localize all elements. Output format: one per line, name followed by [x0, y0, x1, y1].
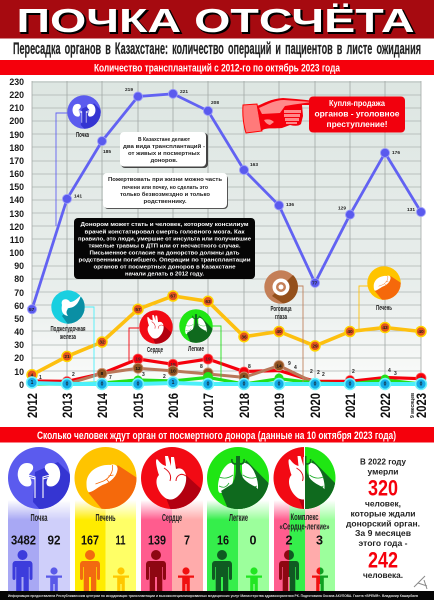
- x axis years: 2016: [165, 393, 181, 418]
- small value labels: 3: [142, 372, 145, 378]
- info box: posthumous donors: Донором может стать и человек, которому консилиум: [80, 222, 248, 228]
- series: pancreas: [27, 377, 426, 389]
- info box: two types of transplant: В Казахстане делают: [138, 137, 190, 143]
- series: liver: 40: [418, 329, 424, 335]
- series: kidney: 219: [125, 87, 133, 93]
- series: kidney: 185: [103, 149, 111, 155]
- panel: lungs waiting: 0: [250, 532, 256, 548]
- info box: living donation: [103, 173, 228, 209]
- y axis labels: 40: [14, 327, 24, 337]
- panel: heart-lung waiting: «Сердце-легкие»: [280, 522, 330, 532]
- x axis years: 2021: [342, 393, 358, 418]
- info box: two types of transplant: доноров.: [150, 158, 178, 164]
- connector lines: [56, 113, 368, 384]
- info box: living donation: Пожертвовать при жизни можно часть: [108, 177, 223, 183]
- series: liver: 36: [241, 334, 247, 340]
- text block: deaths on waiting list: В 2022 году: [360, 458, 407, 466]
- panel: liver waiting: [74, 447, 156, 591]
- series: kidney: 221: [180, 89, 188, 95]
- y axis labels: 180: [9, 143, 24, 153]
- series: pancreas: 0: [66, 382, 69, 388]
- x axis years: 2020: [307, 393, 323, 418]
- panel: liver waiting: Печень: [96, 513, 116, 524]
- text block: deaths on waiting list: донорский орган.: [346, 520, 420, 528]
- info box: posthumous donors: начали делать в 2012 году.: [125, 272, 204, 278]
- info box: living donation: печени или почку, но сделать это: [122, 185, 209, 191]
- y axis labels: 230: [9, 77, 24, 87]
- x axis years: 2015: [130, 393, 146, 418]
- callout: illegal organ trade: [309, 96, 405, 132]
- panel: heart-lung waiting: [274, 447, 336, 591]
- info box: posthumous donors: врачей констатировал смерть головного мозга. Как: [84, 228, 245, 236]
- icon: cornea: Роговица: [270, 306, 292, 313]
- series: cornea: 5: [243, 375, 246, 381]
- small value labels: 4: [388, 368, 391, 374]
- line chart: transplants by organ: [9, 77, 429, 418]
- icon: cornea: глаза: [275, 314, 287, 321]
- series: liver: 43: [382, 325, 388, 331]
- series: liver: 40: [276, 329, 282, 335]
- y axis labels: 210: [9, 103, 24, 113]
- series: liver: 29: [312, 344, 318, 350]
- y axis labels: 160: [9, 169, 24, 179]
- info box: posthumous donors: родственники погибшего. Операции по трансплантации: [78, 256, 251, 264]
- series: heart: 4: [420, 376, 423, 382]
- icon: liver: Печень: [376, 305, 392, 312]
- series: pancreas: 0: [101, 382, 104, 388]
- small value labels: 2: [317, 370, 320, 376]
- y axis labels: 70: [14, 288, 24, 298]
- y axis labels: 140: [9, 195, 24, 205]
- small value labels: 2: [163, 374, 166, 380]
- y axis labels: 20: [14, 353, 24, 363]
- series: heart: 19: [135, 357, 141, 363]
- series: liver: 32: [99, 340, 105, 346]
- small value labels: 2: [72, 372, 75, 378]
- panel: lungs waiting: 16: [217, 532, 229, 548]
- series: cornea: 12: [135, 366, 141, 372]
- callout: illegal organ trade: органов - уголовное: [314, 110, 400, 118]
- y axis labels: 220: [9, 90, 24, 100]
- small value labels: 8: [200, 364, 203, 370]
- text block: deaths on waiting list: 320: [368, 476, 398, 500]
- icon: kidney: Почка: [76, 132, 89, 139]
- callout: illegal organ trade: Купля-продажа: [329, 99, 386, 108]
- panel: heart waiting: 7: [184, 532, 190, 548]
- series: pancreas: 1: [172, 380, 175, 386]
- info box: two types of transplant: [120, 132, 208, 168]
- series: kidney: 176: [392, 150, 400, 156]
- info box: posthumous donors: тяжелые травмы в ДТП или от несчастного случая.: [88, 244, 241, 250]
- y axis labels: 60: [14, 301, 24, 311]
- small value labels: 3: [394, 371, 397, 377]
- icon: heart: Сердце: [147, 347, 163, 354]
- panel: lungs waiting: [207, 447, 288, 591]
- series: kidney: 136: [286, 202, 294, 208]
- y axis labels: 200: [9, 116, 24, 126]
- signature mark: [414, 576, 427, 589]
- y axis labels: 10: [14, 367, 24, 377]
- info box: posthumous donors: правило, это люди, умершие от инсульта или получившие: [78, 236, 252, 242]
- icon: pancreas: [50, 290, 86, 339]
- panel: heart-lung waiting: 3: [316, 532, 323, 548]
- text block: deaths on waiting list: этого года -: [358, 539, 408, 548]
- icon: heart: [139, 310, 183, 354]
- y axis labels: 50: [14, 314, 24, 324]
- y axis labels: 150: [9, 182, 24, 192]
- x axis years: 2019: [271, 393, 287, 418]
- y axis labels: 80: [14, 274, 24, 284]
- series: pancreas: 0: [420, 382, 423, 388]
- series: kidney: 163: [250, 162, 258, 168]
- x axis years: 9 месяцев: [410, 393, 416, 418]
- info box: two types of transplant: от живых и посмертных: [128, 151, 201, 157]
- info box: living donation: родственнику.: [144, 199, 187, 205]
- series: kidney: 208: [211, 100, 219, 106]
- series: cornea: [67, 361, 315, 384]
- series: cornea: 8: [101, 371, 104, 377]
- panel: liver waiting: 167: [81, 532, 99, 548]
- chart heading band: Количество трансплантаций с 2012-го по октябрь 2023 года: [94, 62, 341, 74]
- y axis labels: 30: [14, 340, 24, 350]
- series: heart: 19: [205, 357, 211, 363]
- panel: heart-lung waiting: Комплекс: [290, 512, 318, 522]
- series: pancreas: 0: [137, 382, 140, 388]
- title banner: ПОЧКА ОТСЧЁТА: [16, 2, 414, 39]
- small value labels: 1: [39, 375, 42, 381]
- series: kidney: 141: [74, 194, 82, 200]
- panel: liver waiting: 11: [116, 532, 126, 548]
- text block: deaths on waiting list: умерли: [368, 468, 399, 476]
- text block: deaths on waiting list: которые ждали: [350, 510, 416, 518]
- y axis labels: 170: [9, 156, 24, 166]
- panel: heart waiting: [141, 447, 222, 591]
- series: pancreas: 0: [207, 382, 210, 388]
- series: pancreas: 0: [278, 382, 281, 388]
- text block: deaths on waiting list: 242: [368, 548, 398, 572]
- panel: heart-lung waiting: 2: [286, 532, 292, 548]
- panel: kidney waiting: Почка: [30, 513, 48, 524]
- panel: lungs waiting: Легкие: [229, 513, 248, 524]
- series: liver: 67: [170, 294, 176, 300]
- text block: deaths on waiting list: человек,: [365, 500, 401, 508]
- callout: illegal organ trade: преступление!: [326, 120, 388, 129]
- icon: liver: [367, 266, 411, 312]
- small value labels: [39, 361, 397, 381]
- x axis years: 2017: [200, 393, 216, 418]
- x axis years: 2022: [377, 393, 393, 418]
- info box: living donation: только безвозмездно и только: [120, 191, 211, 198]
- icon: pancreas: железа: [59, 334, 76, 341]
- y axis labels: 130: [9, 209, 24, 219]
- series: heart: 15: [170, 362, 176, 368]
- small value labels: 2: [352, 369, 355, 375]
- icon: lungs: Легкие: [188, 346, 204, 353]
- series: kidney: [28, 87, 426, 314]
- y axis labels: 190: [9, 130, 24, 140]
- info box: posthumous donors: Письменное согласие на донорство должны дать: [90, 250, 240, 256]
- x axis years: [24, 393, 429, 418]
- series: kidney: 77: [312, 281, 318, 287]
- series: liver: 21: [64, 354, 70, 360]
- y axis labels: 120: [9, 222, 24, 232]
- x axis years: 2013: [59, 393, 75, 418]
- series: kidney: 131: [407, 207, 415, 213]
- info box: two types of transplant: два вида трансплантаций -: [123, 143, 205, 150]
- panel: kidney waiting: [8, 447, 89, 591]
- series: heart: [32, 354, 426, 386]
- series: pancreas: 0: [384, 382, 387, 388]
- info box: posthumous donors: [74, 218, 255, 279]
- series: lungs: [32, 372, 421, 384]
- series: liver: 63: [205, 299, 211, 305]
- series: pancreas: 0: [349, 382, 352, 388]
- text block: deaths on waiting list: человека.: [363, 571, 403, 580]
- icon: pancreas: Поджелудочная: [50, 326, 86, 333]
- icon: cornea: [264, 270, 298, 321]
- info box: posthumous donors: органов от посмертных доноров в Казахстане: [94, 264, 236, 270]
- y axis labels: 110: [10, 235, 24, 245]
- callout: pointing hand: [243, 98, 317, 133]
- series: cornea: 10: [170, 369, 176, 375]
- y axis labels: 100: [9, 248, 24, 258]
- series: pancreas: 1: [31, 380, 34, 386]
- title banner: ПОЧКА ОТСЧЁТА: [18, 4, 416, 40]
- chart heading band: [0, 60, 434, 75]
- y axis labels: 0: [19, 380, 24, 390]
- x axis years: 2014: [94, 393, 110, 418]
- small value labels: 4: [294, 365, 297, 371]
- series: pancreas: 0: [314, 382, 317, 388]
- small value labels: 2: [310, 369, 313, 375]
- icon: kidney: [67, 95, 111, 139]
- x axis years: 2012: [24, 393, 40, 418]
- series: kidney: 129: [338, 206, 346, 212]
- panel: heart waiting: 139: [148, 532, 166, 548]
- y axis labels: 90: [14, 261, 24, 271]
- x axis years: 2018: [236, 393, 252, 418]
- series: liver: 40: [347, 329, 353, 335]
- series: liver: 4: [31, 372, 34, 378]
- x axis years: 2023: [413, 393, 429, 418]
- small value labels: 9: [288, 361, 291, 367]
- panel: kidney waiting: 92: [48, 532, 60, 548]
- text block: deaths on waiting list: За 9 месяцев: [355, 529, 411, 538]
- small value labels: 8: [248, 364, 251, 370]
- series: liver: [27, 291, 426, 380]
- panel: kidney waiting: 3482: [11, 532, 36, 548]
- footer credits: [0, 591, 434, 600]
- title banner: [0, 0, 434, 40]
- series: kidney: 57: [29, 307, 35, 313]
- series: pancreas: 0: [243, 382, 246, 388]
- small value labels: 7: [109, 375, 112, 381]
- small value labels: 2: [322, 372, 325, 378]
- y axis labels: [9, 77, 24, 390]
- series: cornea: 14: [276, 363, 282, 369]
- panel: heart waiting: Сердце: [162, 513, 182, 524]
- text block: deaths on waiting list: [346, 458, 420, 580]
- icon: lungs: [179, 309, 223, 353]
- series: liver: 57: [135, 307, 141, 313]
